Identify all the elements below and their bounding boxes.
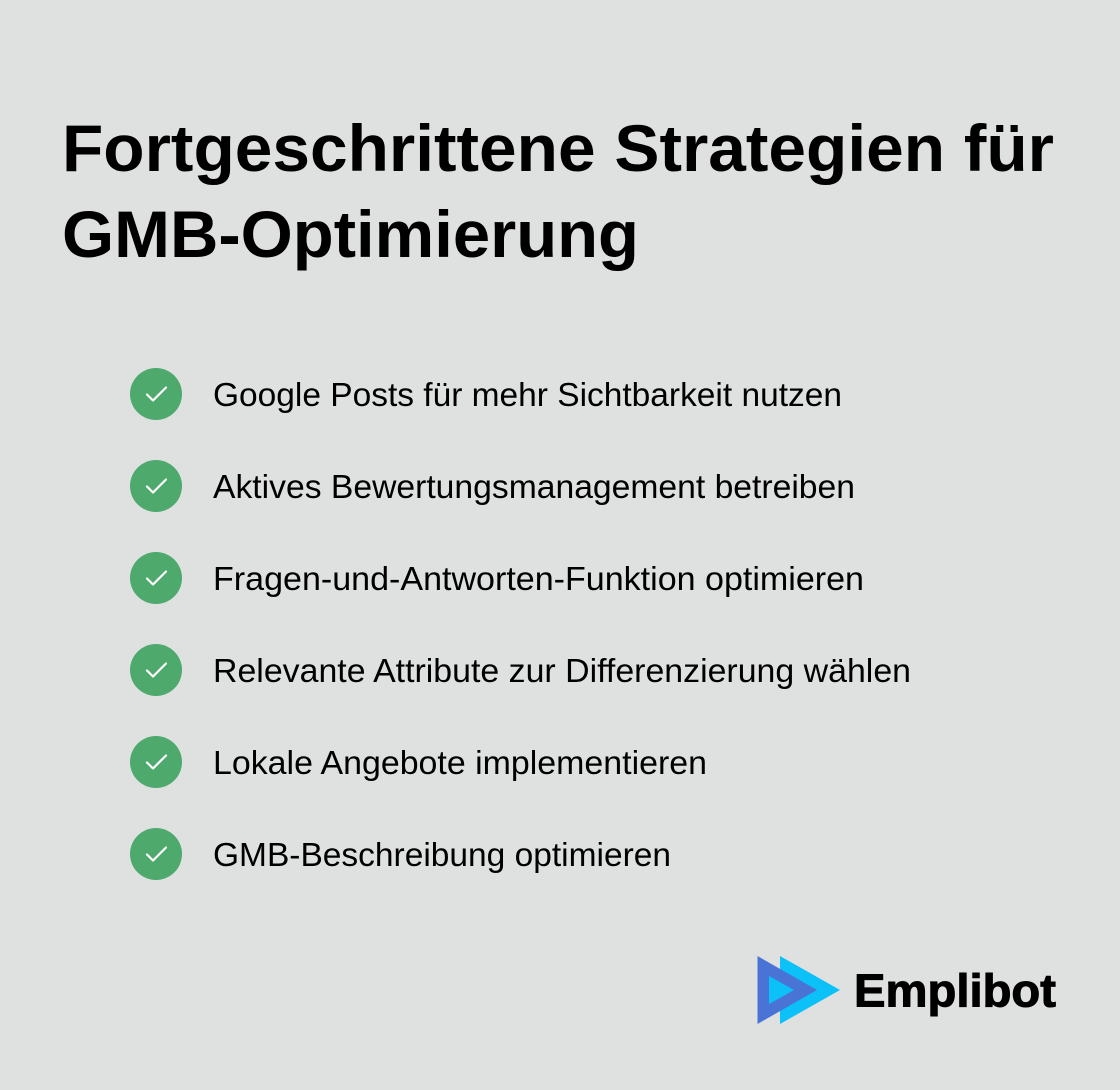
logo: Emplibot — [758, 956, 1056, 1024]
list item: Google Posts: Google Posts für mehr Sichtbarkeit nutzen — [213, 376, 842, 413]
title: Fortgeschrittene Strategien für — [62, 111, 1054, 185]
list item: Lokale Angebote — [130, 736, 707, 788]
title — [62, 111, 1054, 271]
list item: Lokale Angebote: Lokale Angebote implementieren — [213, 744, 707, 781]
title: GMB-Optimierung — [62, 197, 639, 271]
list item: GMB-Beschreibung: GMB-Beschreibung optimieren — [213, 836, 671, 873]
list item: Fragen und Antworten: Fragen-und-Antworten-Funktion optimieren — [213, 560, 864, 597]
list item: Bewertungsmanagement: Aktives Bewertungsmanagement betreiben — [213, 468, 855, 505]
logo: Emplibot: Emplibot — [854, 964, 1056, 1016]
list item: Google Posts — [130, 368, 842, 420]
list item: GMB-Beschreibung — [130, 828, 671, 880]
list item: Bewertungsmanagement — [130, 460, 855, 512]
list item: Fragen und Antworten — [130, 552, 864, 604]
icon: play triangles — [758, 956, 840, 1024]
list item: Attribute — [130, 644, 911, 696]
list item: Attribute: Relevante Attribute zur Differenzierung wählen — [213, 652, 911, 689]
checklist — [130, 368, 911, 880]
